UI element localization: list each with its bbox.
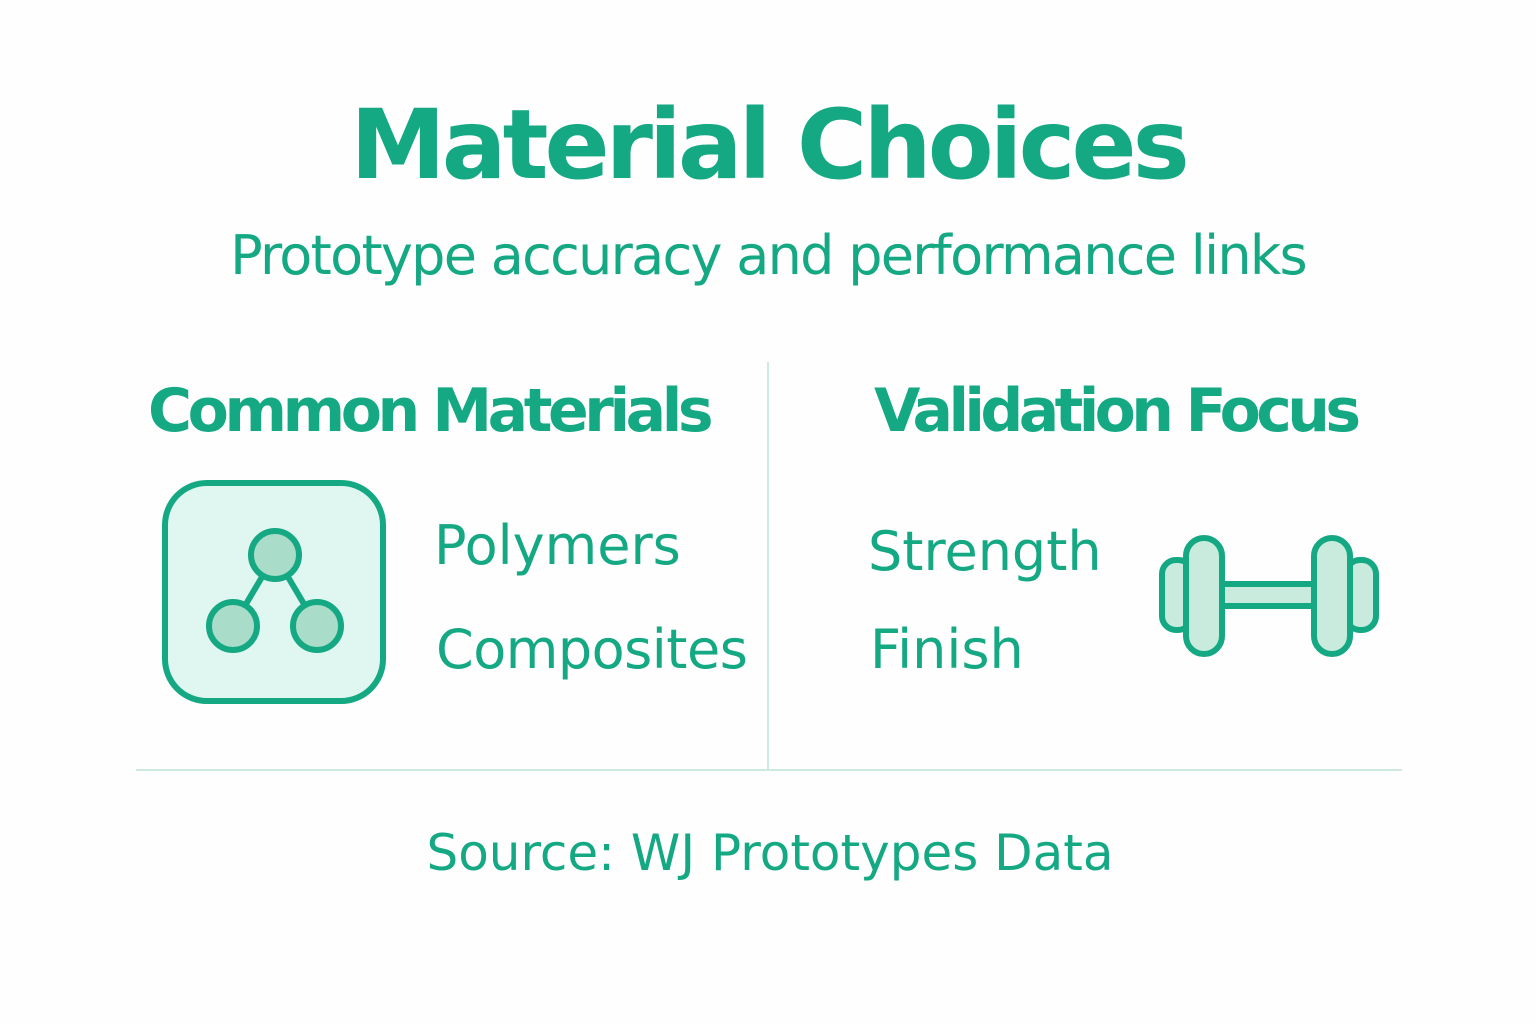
text: strength: Strength (868, 520, 1102, 583)
icon: molecule (162, 480, 386, 704)
text: finish: Finish (870, 618, 1024, 681)
text: polymers: Polymers (434, 514, 681, 577)
horizontal divider (136, 769, 1402, 771)
text: composites: Composites (436, 618, 747, 681)
icon: dumbbell (1159, 535, 1379, 657)
heading: common materials: Common Materials (148, 376, 709, 446)
title: Material Choices (350, 89, 1186, 201)
heading: validation focus: Validation Focus (874, 376, 1356, 446)
subtitle: Prototype accuracy and performance links (230, 224, 1306, 287)
source footer: Source: WJ Prototypes Data (426, 824, 1114, 882)
vertical divider (767, 362, 769, 770)
